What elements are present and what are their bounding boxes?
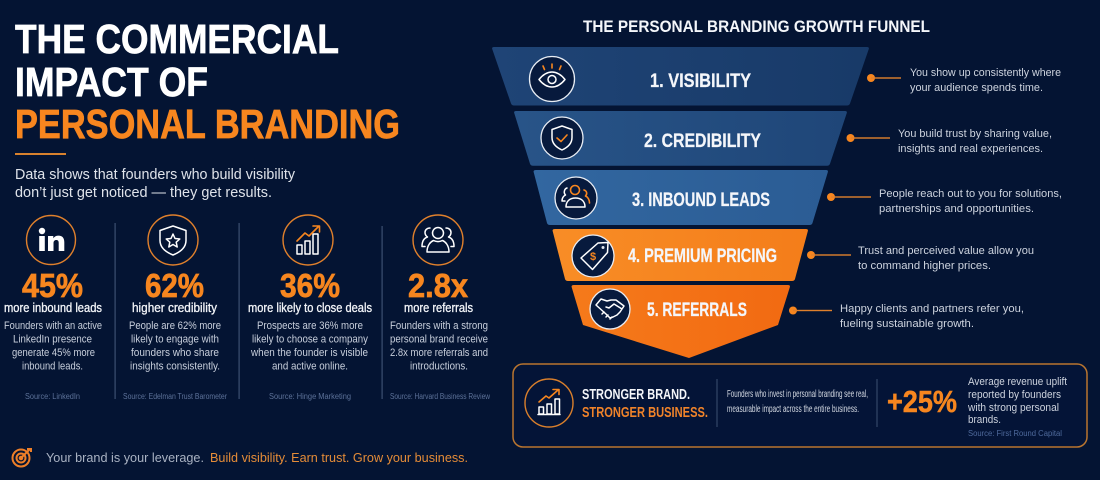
statistic description xyxy=(967,376,1067,426)
icon: price tag: $ xyxy=(590,251,596,263)
icon: people with orange lead xyxy=(562,186,590,207)
title: THE COMMERCIAL xyxy=(15,16,339,62)
statistic description: with strong personal xyxy=(967,402,1059,414)
subtitle: Data shows that founders who build visibility xyxy=(15,167,296,183)
source: Source: LinkedIn xyxy=(25,392,80,401)
callout 4: Trust and perceived value allow you xyxy=(858,245,1034,257)
funnel tier 1: visibility: 1. VISIBILITY xyxy=(650,70,751,92)
icon: price tag xyxy=(581,242,608,270)
icon: shield with star xyxy=(148,215,198,265)
funnel chart xyxy=(492,47,869,358)
description: Prospects are 36% more xyxy=(257,320,363,332)
source: Source: Hinge Marketing xyxy=(269,392,351,401)
callout 4 xyxy=(807,245,1034,272)
funnel tier 3: inbound leads: 3. INBOUND LEADS xyxy=(632,189,770,211)
description: Founders who invest in personal branding see real, xyxy=(727,389,868,400)
subtitle: don’t just get noticed — they get results. xyxy=(15,185,272,201)
callout 2: You build trust by sharing value, xyxy=(898,128,1052,140)
description: insights consistently. xyxy=(130,360,220,372)
statistic description: Average revenue uplift xyxy=(968,376,1067,388)
description: 2.8x more referrals and xyxy=(390,347,488,359)
funnel tier 3: inbound leads xyxy=(534,170,828,225)
funnel tier 4: premium pricing: 4. PREMIUM PRICING xyxy=(628,245,777,267)
statistic: +25% xyxy=(887,384,957,419)
icon: target xyxy=(12,449,31,466)
panel: stat deals xyxy=(248,215,372,401)
description xyxy=(129,320,221,372)
title xyxy=(15,16,400,147)
subheading: more inbound leads xyxy=(4,301,102,315)
description xyxy=(727,389,868,415)
heading: STRONGER BRAND. xyxy=(582,387,690,403)
subheading: more likely to close deals xyxy=(248,301,372,315)
icon: growth chart xyxy=(525,379,573,427)
description xyxy=(4,320,102,372)
description: People are 62% more xyxy=(129,320,221,332)
callout 1 xyxy=(867,67,1061,94)
subheading: higher credibility xyxy=(132,301,218,315)
description: inbound leads. xyxy=(22,360,83,372)
description xyxy=(390,320,488,372)
funnel tier 5: referrals xyxy=(572,285,790,358)
tagline xyxy=(46,450,468,465)
callout 4: to command higher prices. xyxy=(858,260,991,272)
icon: handshake xyxy=(596,299,624,319)
description: measurable impact across the entire business. xyxy=(727,404,859,415)
panel: stronger brand summary xyxy=(513,364,1087,447)
funnel tier 2: credibility: 2. CREDIBILITY xyxy=(644,130,761,152)
callout 2 xyxy=(846,128,1052,155)
heading xyxy=(582,387,708,421)
title: IMPACT OF xyxy=(15,59,208,105)
description: likely to choose a company xyxy=(252,334,369,346)
description: and active online. xyxy=(272,360,348,372)
description xyxy=(250,320,369,372)
panel: stat referrals xyxy=(390,215,490,401)
statistic: 36% xyxy=(280,267,340,304)
description: founders who share xyxy=(131,347,219,359)
statistic: 62% xyxy=(145,267,204,304)
title: PERSONAL BRANDING xyxy=(15,101,400,147)
statistic description: brands. xyxy=(968,414,1001,426)
icon: rising bar chart xyxy=(283,215,333,265)
statistic description: reported by founders xyxy=(968,389,1061,401)
panel: stat credibility xyxy=(123,215,227,401)
source: Source: First Round Capital xyxy=(968,429,1062,438)
callout 3: partnerships and opportunities. xyxy=(879,203,1034,215)
description: personal brand receive xyxy=(390,334,488,346)
heading: STRONGER BUSINESS. xyxy=(582,405,708,421)
tagline: Your brand is your leverage. xyxy=(46,450,204,465)
statistic: 2.8x xyxy=(408,267,469,304)
icon: shield check xyxy=(552,126,572,150)
subheading: more referrals xyxy=(404,301,473,315)
icon: LinkedIn xyxy=(26,216,76,264)
tagline: Build visibility. Earn trust. Grow your business. xyxy=(210,450,468,465)
source: Source: Harvard Business Review xyxy=(390,392,490,401)
funnel heading: THE PERSONAL BRANDING GROWTH FUNNEL xyxy=(583,18,930,36)
funnel tier 5: referrals: 5. REFERRALS xyxy=(647,299,747,321)
callout 1: You show up consistently where xyxy=(910,67,1061,79)
description: likely to engage with xyxy=(131,334,219,346)
description: Founders with a strong xyxy=(390,320,488,332)
icon: eye xyxy=(539,64,565,87)
callout 2: insights and real experiences. xyxy=(898,143,1043,155)
funnel tier 2: credibility xyxy=(514,111,847,166)
callout 5: fueling sustainable growth. xyxy=(840,318,974,330)
funnel tier 4: premium pricing xyxy=(553,229,808,281)
callout 3 xyxy=(827,188,1062,215)
funnel tier 1: visibility xyxy=(492,47,869,106)
description: LinkedIn presence xyxy=(13,334,92,346)
callout 5: Happy clients and partners refer you, xyxy=(840,303,1024,315)
callout 5 xyxy=(789,303,1024,330)
callout 1: your audience spends time. xyxy=(910,82,1043,94)
source: Source: Edelman Trust Barometer xyxy=(123,392,227,401)
subtitle xyxy=(15,167,296,201)
statistic: 45% xyxy=(22,267,83,304)
description: when the founder is visible xyxy=(250,347,368,359)
panel: stat LinkedIn xyxy=(4,216,102,401)
description: introductions. xyxy=(410,360,468,372)
icon: group of people xyxy=(413,215,463,265)
description: generate 45% more xyxy=(12,347,95,359)
callout 3: People reach out to you for solutions, xyxy=(879,188,1062,200)
description: Founders with an active xyxy=(4,320,102,332)
